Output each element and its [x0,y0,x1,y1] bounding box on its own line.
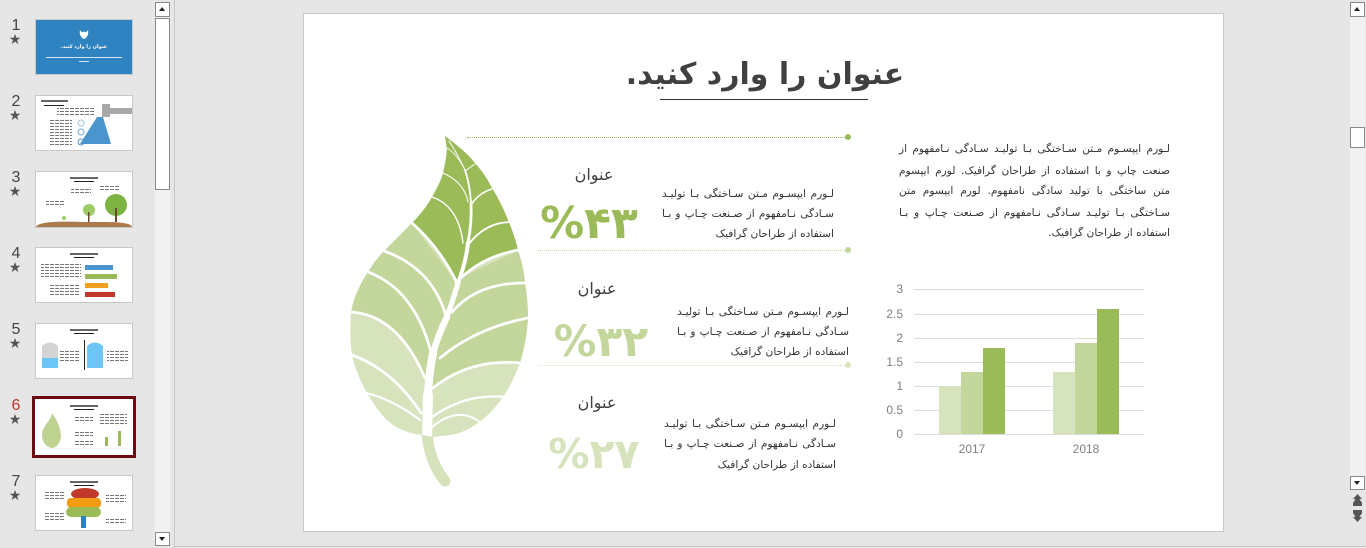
section 3: 27 percent [548,393,836,478]
thumbnail 3: ★ [9,183,21,199]
thumbnail 2 [9,93,132,150]
thumbnail 6 (selected): ★ [9,411,21,427]
paragraph right: صنعت چاپ و با استفاده از طراحان گرافیک. لورم ایپسوم [899,165,1170,177]
body text: لـورم ایپسـوم مـتن سـاختگی بـا تولیـد [664,418,836,430]
x axis labels [959,442,1100,456]
thumbnail 3: 3 [12,169,21,186]
y axis labels: 1 [896,379,903,393]
x axis labels: 2018 [1073,442,1100,456]
thumbnail 1: عنوان را وارد کنید. [61,44,107,50]
body text: لـورم ایپسـوم مـتن سـاختگی بـا تولیـد [677,306,849,318]
divider bottom [538,250,845,251]
divider bottom [538,365,845,366]
body text: استفاده از طراحان گرافیک [731,346,849,358]
thumbnail 4: ★ [9,259,21,275]
heading: عنوان [578,393,616,412]
thumbnail 1: ★ [9,31,21,47]
right scrollbar [1350,2,1365,490]
main vein [427,395,428,438]
stem [427,432,445,481]
percentage: %۳۲ [554,318,648,367]
thumbnail 6 (selected): 6 [12,397,21,414]
thumbnail 2: ★ [9,107,21,123]
thumbnail 5 [9,321,132,378]
section 1: 43 percent [467,134,851,253]
thumbnail 2: 2 [12,93,21,110]
paragraph right: لـورم ایپسـوم مـتن سـاختگی بـا تولیـد سـادگی نـامفهوم از [899,143,1170,155]
heading: عنوان [575,165,613,184]
heading: عنوان [578,279,616,298]
thumbnail sidebar [9,17,136,531]
leaf illustration [350,136,528,486]
thumbnail 7: ★ [9,487,21,503]
previous and next slide arrows [1353,494,1362,522]
thumbnail 1 [9,17,132,74]
y axis labels [886,282,903,441]
body text [662,188,834,240]
thumbnail 7 [9,473,132,530]
thumbnail 4: 4 [12,245,21,262]
y axis labels: 0 [896,427,903,441]
y axis labels: 2.5 [886,307,903,321]
body text: استفاده از طراحان گرافیک [718,459,836,471]
y axis labels: 1.5 [886,355,903,369]
thumbnail 5: ★ [9,335,21,351]
y axis labels: 2 [896,331,903,345]
thumbnail 6 (selected) [9,397,134,456]
paragraph right: سـاختگی بـا تولیـد سـادگی نـامفهوم از صـنعت چـاپ و بـا [899,207,1170,219]
paragraph right [898,142,1170,239]
y axis labels: 3 [896,282,903,296]
left scrollbar [155,2,170,546]
thumbnail 3 [9,169,132,228]
thumbnail 7: 7 [12,473,21,490]
section 2: 32 percent [538,279,851,368]
body text: لـورم ایپسـوم مـتن سـاختگی بـا تولیـد [662,188,834,200]
x axis labels: 2017 [959,442,986,456]
leaf veins [351,141,528,438]
body text [664,418,836,471]
bars 2018 [1053,309,1119,434]
body text: استفاده از طراحان گرافیک [716,228,834,240]
body text [677,306,849,358]
title: عنوان را وارد کنید. [626,57,904,92]
body text: سـادگی نـامفهوم از صـنعت چـاپ و بـا [662,208,834,220]
paragraph right: متن ساختگی با تولید سادگی نامفهوم. لورم ایپسوم متن [899,185,1170,197]
body text: سـادگی نـامفهوم از صـنعت چـاپ و بـا [664,438,836,450]
leaf bands [350,136,528,437]
thumbnail 5: 5 [12,321,21,338]
paragraph right: استفاده از طراحان گرافیک. [1048,227,1170,239]
y axis labels: 0.5 [886,403,903,417]
percentage: %۲۷ [548,430,640,478]
bar chart [886,282,1144,456]
body text: سـادگی نـامفهوم از صـنعت چـاپ و بـا [677,326,849,338]
percentage: %۴۳ [540,198,638,249]
divider top [467,137,845,138]
thumbnail 1: 1 [12,17,21,34]
slide [303,13,1224,532]
thumbnail 4 [9,245,132,302]
bars 2017 [939,348,1005,434]
